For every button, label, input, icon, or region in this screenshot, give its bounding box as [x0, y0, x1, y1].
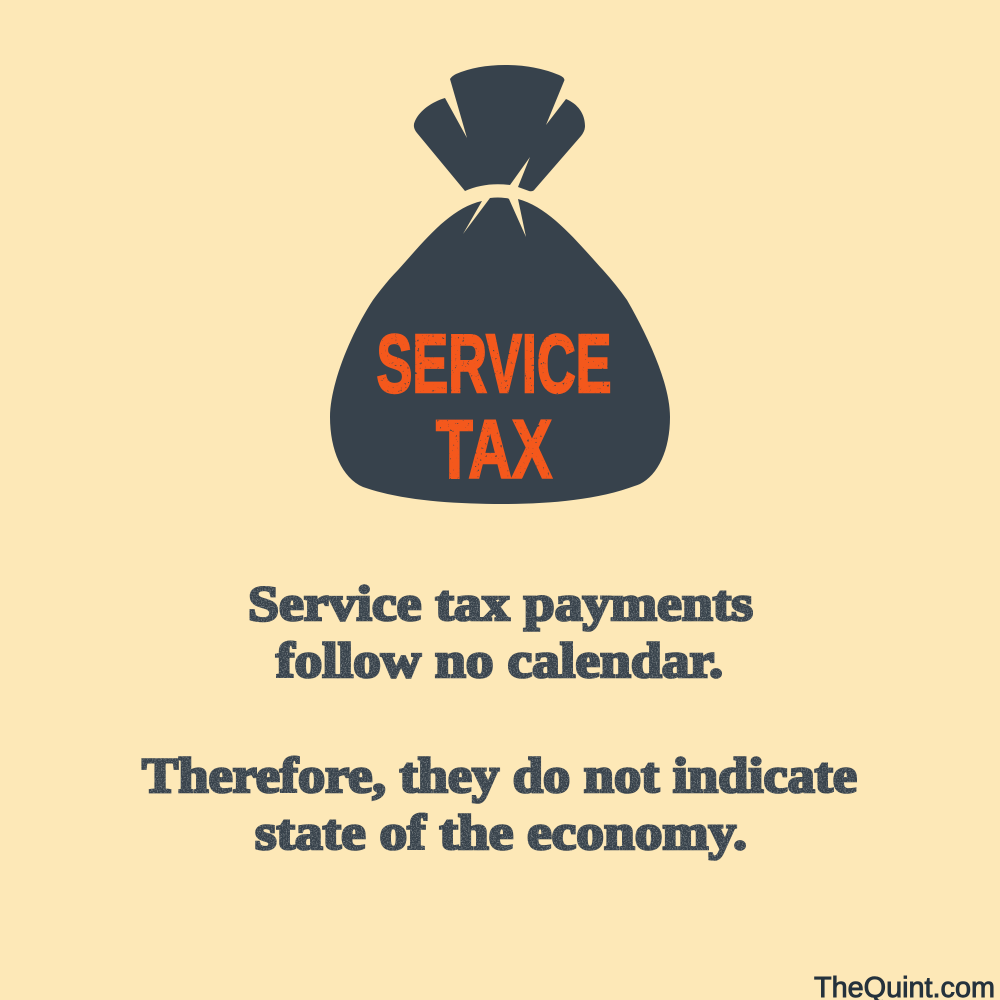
text block: main message [142, 575, 857, 860]
line: state of the economy: state of the economy. [255, 804, 747, 860]
label line: tax: TAX [436, 402, 552, 496]
line: follow no calendar: follow no calendar. [276, 632, 723, 688]
line: therefore they do not indicate: Therefore, they do not indicate [142, 747, 857, 803]
line: service tax payments: Service tax payments [248, 575, 753, 631]
icon: money bag [330, 65, 670, 504]
bag body [330, 198, 670, 504]
label line: service: SERVICE [376, 317, 612, 410]
bag top knot [414, 65, 585, 191]
bag label: service tax [376, 317, 612, 496]
